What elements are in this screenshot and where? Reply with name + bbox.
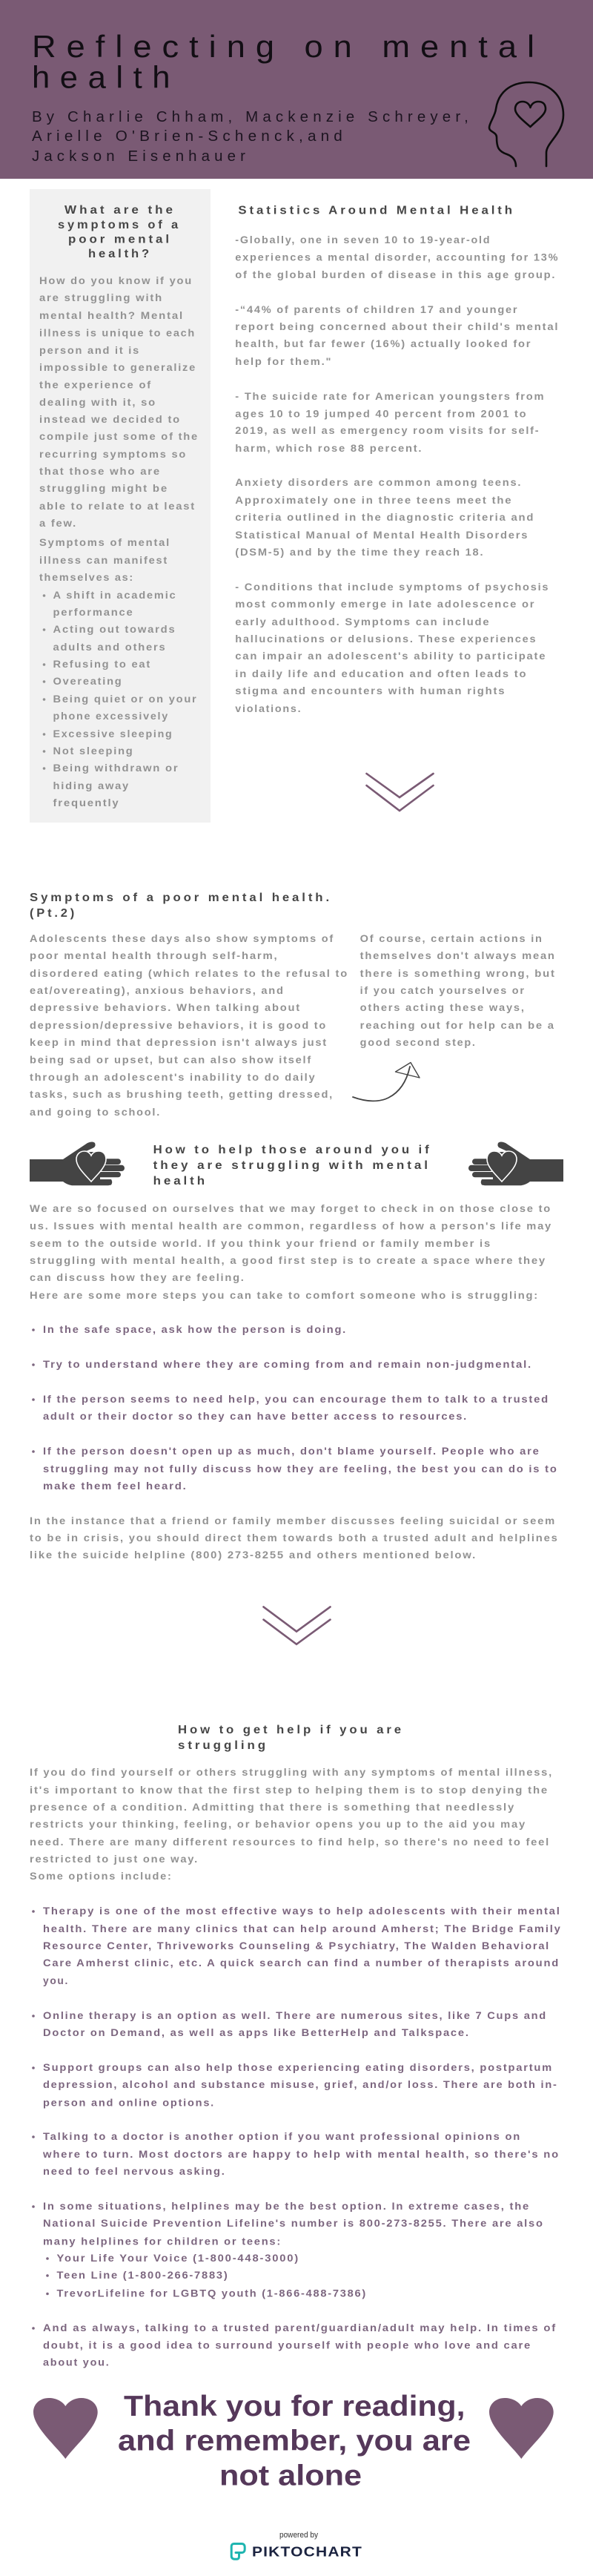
list: help options: Teen Line (1-800-266-7883) (56, 2269, 228, 2281)
closing message: and remember, you are (118, 2425, 471, 2457)
sidebar intro text: a few. (39, 517, 77, 529)
symptoms list: A shift in academic (53, 589, 176, 601)
text block: symptoms part 2: disordered eating (which relates to the refusal to (30, 967, 348, 979)
symptoms list: Excessive sleeping (53, 728, 173, 739)
closing message (118, 2391, 471, 2492)
text block: helping others intro: Here are some more steps you can take to comfort someone who is struggling: (30, 1289, 539, 1301)
sidebar intro text: mental health? Mental (39, 309, 184, 321)
text block: symptoms part 2: and going to school. (30, 1106, 161, 1118)
authors byline: Arielle O'Brien-Schenck,and (32, 128, 347, 145)
icon: right hand holding heart (468, 1142, 563, 1185)
list: steps to comfort: If the person seems to need help, you can encourage them to talk to a trusted (43, 1393, 549, 1405)
text block: statistics: can impair an adolescent's ability to participate (235, 650, 546, 662)
title: Reflecting on mental (32, 29, 545, 64)
list: help options: you. (43, 1974, 69, 1986)
text block: symptoms part 2: tasks, such as brushing teeth, getting dressed, (30, 1088, 334, 1100)
sidebar heading: health? (88, 248, 152, 260)
sidebar intro text: able to relate to at least (39, 500, 196, 512)
list: help options: person and online options. (43, 2096, 215, 2108)
heading: how to help (153, 1144, 432, 1187)
text block: reaching out: there is something wrong, but (360, 967, 556, 979)
sidebar intro text: are struggling with (39, 291, 163, 303)
text block: statistics: - The suicide rate for American youngsters from (235, 390, 545, 402)
footer: powered by piktochart (231, 2531, 362, 2560)
sidebar intro text: person and it is (39, 344, 140, 356)
text block: reaching out (360, 932, 556, 1048)
heading: symptoms part 2: Symptoms of a poor mental health. (30, 892, 332, 904)
sidebar intro text: dealing with it, so (39, 396, 156, 408)
text block: statistics: ages 10 to 19 jumped 40 percent from 2001 to (235, 408, 527, 420)
list: help options: where to turn. Most doctors are happy to help with mental health, so there's no (42, 2148, 560, 2160)
sidebar intro text: the experience of (39, 379, 152, 391)
sidebar intro text: impossible to generalize (39, 361, 196, 373)
text block: statistics: - Conditions that include symptoms of psychosis (235, 581, 549, 593)
text block: getting help intro: restricts your thinking, feeling, or behavior opens you up to the aid you may (30, 1818, 526, 1830)
sidebar intro text: struggling might be (39, 482, 168, 494)
symptoms list (43, 589, 198, 808)
symptoms list: performance (53, 606, 133, 618)
symptoms list: Acting out towards (53, 623, 176, 635)
symptoms list: hiding away (53, 780, 130, 791)
list: help options: doubt, it is a good idea to surround yourself with people who love and care (43, 2339, 531, 2351)
arrow: hand-drawn curved up (353, 1062, 420, 1101)
heading: how to get help: How to get help if you are (178, 1724, 404, 1736)
text block: statistics: in daily life and education and often leads to (235, 668, 527, 679)
text block: getting help intro: restricted to just one way. (30, 1853, 199, 1865)
sidebar intro text: recurring symptoms so (39, 448, 187, 460)
heading: how to help: How to help those around you if (153, 1144, 432, 1156)
text block: statistics: hallucinations or delusions. These experiences (235, 633, 537, 645)
panel: header banner (0, 0, 593, 179)
icon: right heart (489, 2398, 554, 2459)
sidebar intro text: How do you know if you (39, 274, 193, 286)
authors byline: Jackson Eisenhauer (32, 148, 250, 165)
text block: getting help intro: need. There are many different resources to find help, so there's no need to feel (30, 1836, 550, 1848)
closing message: not alone (219, 2460, 362, 2492)
text block: crisis note: to be in crisis, you should direct them towards both a trusted adult and helplines (30, 1532, 559, 1544)
list: help options (32, 1905, 562, 2368)
icon: left heart (33, 2398, 98, 2459)
text block: helping others intro: seem to the outside world. If you think your friend or family member is (30, 1237, 491, 1249)
list: help options: Therapy is one of the most effective ways to help adolescents with their mental (43, 1905, 561, 1917)
icon: left hand holding heart (30, 1142, 125, 1185)
text block: statistics: Statistical Manual of Mental Health Disorders (235, 529, 529, 541)
panel: symptoms sidebar (30, 189, 211, 823)
icon: double chevron down (264, 1607, 331, 1644)
text block: helping others intro (30, 1202, 552, 1301)
footer: powered by piktochart: PIKTOCHART (252, 2545, 362, 2560)
sidebar heading (58, 204, 181, 260)
list: help options: And as always, talking to a trusted parent/guardian/adult may help. In times of (43, 2322, 557, 2333)
text block: statistics: -Globally, one in seven 10 to 19-year-old (235, 234, 491, 246)
text block: symptoms part 2: keep in mind that depression isn't always just (30, 1036, 328, 1048)
text block: getting help intro: Some options include: (30, 1870, 173, 1882)
list: help options: Doctor on Demand, as well as apps like BetterHelp and Talkspace. (43, 2026, 470, 2038)
text block: helping others intro: We are so focused on ourselves that we may forget to check in on those close to (30, 1202, 551, 1214)
list: help options: about you. (43, 2356, 110, 2368)
list: help options: depression, alcohol and substance misuse, grief, and/or loss. There are both in- (43, 2078, 558, 2090)
text block: statistics: health, but far fewer (16%) actually looked for (235, 337, 531, 349)
list: help options: Care Amherst clinic, etc. A quick search can find a number of therapists around (43, 1957, 560, 1969)
text block: symptoms part 2: Adolescents these days also show symptoms of (30, 932, 334, 944)
symptoms list: Overeating (53, 675, 123, 687)
sidebar heading: symptoms of a (58, 219, 181, 231)
title (32, 29, 545, 95)
heading: how to help: they are struggling with mental (153, 1159, 431, 1172)
text block: getting help intro: it's important to know that the first step to helping them is to stop denying the (30, 1784, 549, 1796)
icon: head with heart (489, 82, 563, 166)
list: steps to comfort: adult or their doctor so they can have better access to resources. (43, 1410, 468, 1422)
text block: statistics: of the global burden of disease in this age group. (235, 269, 556, 280)
closing message: Thank you for reading, (124, 2391, 466, 2422)
symptoms list: Being withdrawn or (53, 762, 179, 774)
text block: symptoms part 2: through an adolescent's inability to do daily (30, 1071, 316, 1083)
list: help options: Your Life Your Voice (1-800-448-3000) (56, 2252, 299, 2264)
text block: getting help intro: If you do find yourself or others struggling with any symptoms of mental illness, (30, 1766, 553, 1778)
text block: statistics: (DSM-5) and by the time they reach 18. (235, 546, 484, 558)
list: help options: Talking to a doctor is another option if you want professional opinions on (43, 2130, 521, 2142)
authors byline (32, 109, 473, 165)
symptoms list: phone excessively (53, 710, 169, 722)
text block: symptoms part 2: being sad or upset, but can also show itself (30, 1054, 312, 1066)
text block: helping others intro: can discuss how they are feeling. (30, 1271, 245, 1283)
symptoms list: Being quiet or on your (53, 693, 197, 705)
sidebar intro text: compile just some of the (39, 430, 199, 442)
text block: crisis note (30, 1515, 559, 1561)
text block: reaching out: others acting these ways, (360, 1001, 526, 1013)
text block: symptoms part 2: poor mental health through self-harm, (30, 949, 279, 961)
sidebar intro text (39, 274, 199, 583)
symptoms list: Refusing to eat (53, 658, 151, 670)
heading: symptoms part 2 (30, 892, 332, 920)
list: steps to comfort: struggling may not fully discuss how they are feeling, the best you can do is to (43, 1463, 558, 1475)
text block: crisis note: In the instance that a friend or family member discusses feeling suicidal or seem (30, 1515, 556, 1526)
list: help options: many helplines for children or teens: (43, 2236, 282, 2247)
text block: statistics: early adulthood. Symptoms can include (235, 616, 490, 627)
text block: symptoms part 2 (30, 932, 348, 1118)
list: help options: Online therapy is an option as well. There are numerous sites, like 7 Cups and (43, 2009, 547, 2021)
list: help options: TrevorLifeline for LGBTQ youth (1-866-488-7386) (56, 2287, 367, 2299)
text block: helping others intro: struggling with mental health, a good first step is to create a space where they (30, 1254, 546, 1266)
authors byline: By Charlie Chham, Mackenzie Schreyer, (32, 109, 473, 125)
heading: how to get help (178, 1724, 404, 1752)
list: help options: Resource Center, Thriveworks Counseling & Psychiatry, The Walden Behavioral (43, 1940, 550, 1951)
sidebar intro text: Symptoms of mental (39, 536, 170, 548)
list: help options: health. There are many clinics that can help around Amherst; The Bridge Family (43, 1923, 562, 1934)
text block: statistics: 2019, as well as emergency room visits for self- (235, 424, 540, 436)
list: help options: need to feel nervous asking. (43, 2165, 226, 2177)
list: steps to comfort: Try to understand where they are coming from and remain non-judgmental. (43, 1358, 532, 1370)
text block: helping others intro: us. Issues with mental health are common, regardless of how a person's life may (30, 1219, 552, 1231)
sidebar intro text: themselves as: (39, 571, 134, 583)
text block: statistics (235, 234, 559, 714)
list: help options: National Suicide Prevention Lifeline's number is 800-273-8255. There are also (43, 2217, 544, 2229)
heading: how to help: health (153, 1175, 208, 1187)
sidebar heading: What are the (64, 204, 176, 217)
sidebar heading: poor mental (68, 233, 172, 246)
list: steps to comfort: If the person doesn't open up as much, don't blame yourself. People who are (43, 1445, 540, 1457)
list: steps to comfort: In the safe space, ask how the person is doing. (43, 1323, 347, 1335)
text block: statistics: most commonly emerge in late adolescence or (235, 598, 535, 610)
text block: reaching out: Of course, certain actions in (360, 932, 543, 944)
text block: reaching out: good second step. (360, 1036, 477, 1048)
text block: statistics: stigma and encounters with human rights (235, 685, 506, 696)
text block: getting help intro: presence of a condition. Admitting that there is something that needlessly (30, 1801, 515, 1813)
symptoms list: Not sleeping (53, 745, 133, 757)
list: steps to comfort (32, 1323, 558, 1492)
text block: symptoms part 2: depression/depressive behaviors, it is good to (30, 1019, 327, 1031)
icon: piktochart logo (231, 2544, 245, 2559)
sidebar intro text: illness can manifest (39, 554, 168, 566)
symptoms list: adults and others (53, 641, 166, 653)
text block: crisis note: like the suicide helpline (800) 273-8255 and others mentioned below. (30, 1549, 477, 1561)
text block: statistics: experiences a mental disorder, accounting for 13% (235, 251, 559, 263)
text block: statistics: Anxiety disorders are common among teens. (235, 476, 522, 488)
text block: symptoms part 2: eat/overeating), anxious behaviors, and (30, 984, 285, 996)
text block: symptoms part 2: depressive behaviors. When talking about (30, 1001, 301, 1013)
heading: how to get help: struggling (178, 1739, 268, 1752)
icon: double chevron down (366, 774, 433, 811)
text block: reaching out: reaching out for help can be a (360, 1019, 555, 1031)
text block: getting help intro (30, 1766, 553, 1882)
text block: statistics: report being concerned about their child's mental (235, 320, 559, 332)
symptoms list: frequently (53, 797, 120, 808)
text block: statistics: criteria outlined in the diagnostic criteria and (235, 511, 534, 523)
heading: statistics: Statistics Around Mental Health (238, 205, 515, 217)
text block: reaching out: if you catch yourselves or (360, 984, 526, 996)
sidebar intro text: that those who are (39, 465, 161, 477)
text block: statistics: Approximately one in three teens meet the (235, 494, 512, 506)
list: steps to comfort: make them feel heard. (43, 1480, 188, 1492)
text block: statistics: -“44% of parents of children 17 and younger (235, 303, 518, 315)
sidebar intro text: illness is unique to each (39, 327, 196, 339)
list: help options: In some situations, helplines may be the best option. In extreme cases, the (43, 2200, 530, 2212)
footer: powered by piktochart: powered by (279, 2531, 318, 2540)
sidebar intro text: instead we decided to (39, 413, 181, 425)
text block: statistics: violations. (235, 702, 302, 714)
text block: statistics: harm, which rose 88 percent. (235, 442, 423, 454)
text block: statistics: help for them." (235, 355, 332, 367)
text block: reaching out: themselves don't always mean (360, 949, 556, 961)
title: health (32, 60, 180, 95)
list: help options: Support groups can also help those experiencing eating disorders, postpartum (43, 2061, 553, 2073)
heading: symptoms part 2: (Pt.2) (30, 907, 77, 920)
